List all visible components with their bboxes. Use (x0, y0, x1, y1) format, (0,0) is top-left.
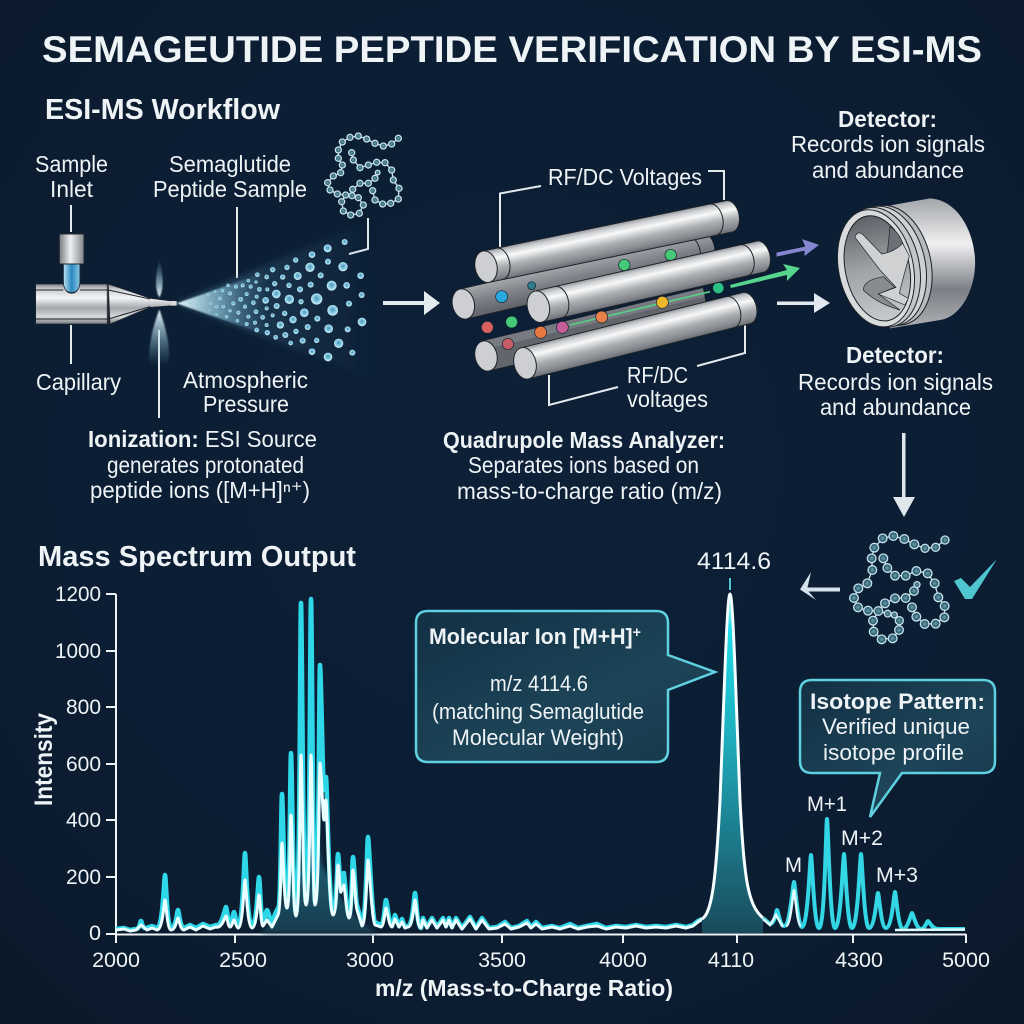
y axis labels: 200 (66, 865, 101, 889)
spectrum trace: cyan peaks (116, 599, 702, 930)
panel: quadrupole analyzer (449, 164, 830, 412)
x axis labels: 3500 (478, 948, 526, 972)
y axis labels: 400 (66, 808, 101, 832)
isotope peaks (763, 819, 965, 929)
text: ionization (88, 426, 317, 503)
label: semaglutide peptide sample (153, 151, 307, 202)
isotope labels: M+3 (876, 864, 918, 887)
x axis labels: 2000 (92, 948, 140, 972)
text: detector upper: Detector: (838, 106, 937, 132)
icon: verified peptide chain (850, 532, 949, 644)
text: quadrupole mass analyzer: mass-to-charge ratio (m/z) (457, 478, 722, 504)
white highlights on M peak and tail (763, 890, 965, 930)
axis lines and ticks (106, 594, 966, 943)
text: detector lower: Records ion signals (798, 369, 993, 395)
arrow: white exit to detector (777, 293, 830, 313)
x axis labels: 3000 (346, 948, 394, 972)
x axis labels: 4110 (708, 948, 754, 972)
icon: electrospray capillary (36, 234, 177, 324)
x axis labels (92, 948, 990, 972)
label: RF/DC voltages lower: RF/DC (627, 362, 688, 388)
callout: isotope pattern (800, 680, 995, 817)
isotope labels (785, 793, 918, 887)
label: RF/DC voltages lower (627, 362, 708, 412)
text: ionization: Ionization: ESI Source (88, 426, 317, 452)
x axis title: m/z (Mass-to-Charge Ratio) (375, 975, 673, 1001)
x axis labels: 4000 (599, 948, 647, 972)
y axis labels: 600 (66, 752, 101, 776)
ion beam in analyzer (481, 249, 724, 350)
label: atmospheric pressure: Atmospheric (183, 367, 308, 393)
x axis labels: 5000 (942, 948, 990, 972)
main peak outline (702, 594, 763, 919)
text: detector lower: and abundance (820, 394, 971, 420)
icon: quadrupole rods (449, 199, 773, 382)
callout: molecular ion: (matching Semaglutide (432, 699, 644, 724)
y axis labels: 800 (66, 695, 101, 719)
spectrum trace: white core (116, 755, 702, 931)
chart: mass spectrum (30, 548, 995, 1001)
spectrum area under cluster (262, 800, 378, 933)
text: detector upper: Records ion signals (791, 131, 985, 157)
label: sample inlet (35, 151, 108, 202)
callout: molecular ion: m/z 4114.6 (490, 671, 588, 696)
y axis labels: 1000 (55, 639, 101, 663)
text: ionization: generates protonated (107, 452, 304, 478)
label: sample inlet: Sample (35, 151, 108, 177)
arrow: verified peptide to spectrum (800, 572, 840, 600)
isotope labels: M (785, 854, 802, 877)
panel: ESI source (35, 133, 402, 418)
icon: spray plume with droplets (149, 220, 383, 383)
arrow: green ion exit (730, 264, 800, 288)
main molecular ion peak (702, 594, 763, 933)
arrow: purple ion exit (777, 240, 818, 256)
arrow: source to analyzer (383, 291, 440, 315)
icon: peptide chain (sample) (325, 133, 402, 218)
label: semaglutide peptide sample: Peptide Sample (153, 176, 307, 202)
callout: isotope pattern: isotope profile (823, 740, 964, 765)
label: semaglutide peptide sample: Semaglutide (169, 151, 291, 177)
icon: check mark (954, 559, 997, 599)
isotope labels: M+2 (841, 827, 883, 850)
label: atmospheric pressure: Pressure (203, 391, 289, 417)
icon: detector (827, 198, 975, 335)
isotope labels: M+1 (807, 793, 847, 816)
x axis labels: 2500 (219, 948, 267, 972)
callout: isotope pattern: Verified unique (822, 714, 970, 739)
callout: isotope pattern: Isotope Pattern: (810, 689, 985, 714)
label: capillary: Capillary (36, 369, 121, 395)
callout: molecular ion (416, 611, 715, 762)
text: detector upper: and abundance (812, 157, 964, 183)
label: peak value: 4114.6 (697, 548, 771, 575)
y axis labels: 0 (89, 921, 101, 945)
title: SEMAGEUTIDE PEPTIDE VERIFICATION BY ESI-MS (42, 29, 982, 70)
text: quadrupole mass analyzer: Separates ions based on (468, 452, 699, 478)
text: quadrupole mass analyzer (443, 427, 725, 504)
label: sample inlet: Inlet (50, 176, 93, 202)
callout: molecular ion: + (633, 624, 641, 641)
heading: mass spectrum output: Mass Spectrum Output (38, 541, 357, 573)
label: RF/DC voltages lower: voltages (627, 386, 708, 412)
text: quadrupole mass analyzer: Quadrupole Mass Analyzer: (443, 427, 725, 453)
text: detector lower: Detector: (846, 342, 944, 368)
text: detector upper (791, 106, 985, 183)
arrow: detector to verified peptide (893, 433, 915, 517)
label: RF/DC voltages upper: RF/DC Voltages (548, 164, 702, 190)
y axis labels: 1200 (55, 582, 101, 606)
y axis title: Intensity (30, 713, 58, 806)
text: ionization: peptide ions ([M+H]ⁿ⁺) (90, 477, 310, 503)
y axis labels (55, 582, 101, 945)
label: atmospheric pressure (183, 367, 308, 417)
text: detector lower (798, 342, 993, 420)
callout: molecular ion: Molecular Weight) (452, 725, 624, 750)
x axis labels: 4300 (835, 948, 883, 972)
callout: molecular ion: Molecular Ion [M+H] (429, 624, 643, 649)
heading: ESI-MS workflow: ESI-MS Workflow (45, 94, 281, 126)
